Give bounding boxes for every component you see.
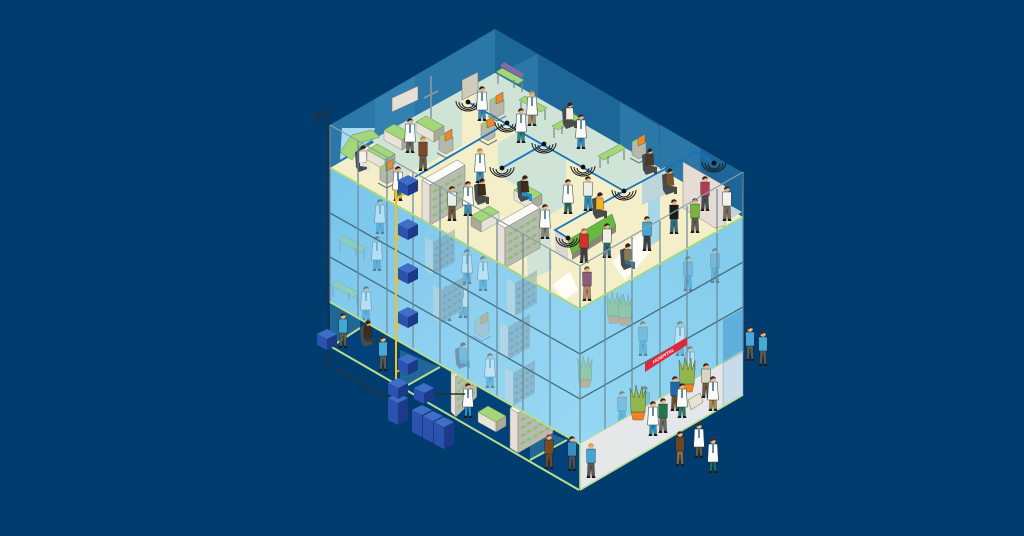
reception desk [568,214,616,254]
wall partitions [375,54,700,193]
server cubes [317,175,454,449]
yellow riser cable [396,190,408,382]
antenna and dark cables [313,108,465,415]
network cable lines [415,102,714,238]
reflections of floors behind glass [331,199,720,426]
top floor edge line [330,168,743,309]
nurse station curved desk [340,130,380,160]
ground floor interior equipment [451,352,553,453]
glass base and upper glass wall [330,302,743,444]
dark glass panel by entrance [723,309,743,362]
hospital entrance sign [645,337,687,372]
floor rugs [552,233,652,300]
ground floor open level [330,302,580,490]
entrance sidewalk [580,352,743,490]
right glass facade [580,217,743,444]
equipment stand [424,76,438,118]
facade mullions and top rail [330,125,743,444]
hospital entrance sign: HOSPITAL [653,347,674,366]
top floor plate [330,73,743,309]
wifi access points [456,100,726,247]
trolley by entrance [688,393,703,410]
people on top floor [355,86,732,301]
roof level back walls [330,29,743,217]
ground floor plan lines [330,328,579,490]
left glass facade [330,168,580,444]
desks [367,144,395,170]
reception counter pale block [642,167,665,205]
furniture top floor [340,62,725,268]
beds [496,68,524,92]
cabinet back left [392,86,418,112]
entrance side door [723,352,743,406]
entrance planters [630,357,695,420]
patient on bed [500,62,524,78]
shelving ground floor [451,352,477,417]
trolleys and monitors [378,159,396,188]
people at entrance and outside [338,313,768,478]
side cabinet at back [462,72,478,100]
room floors [340,73,742,280]
floor slab lines on facade [330,213,743,399]
shelving units [422,160,465,225]
ground floor blue panels [330,302,567,460]
locker wall [683,162,725,228]
